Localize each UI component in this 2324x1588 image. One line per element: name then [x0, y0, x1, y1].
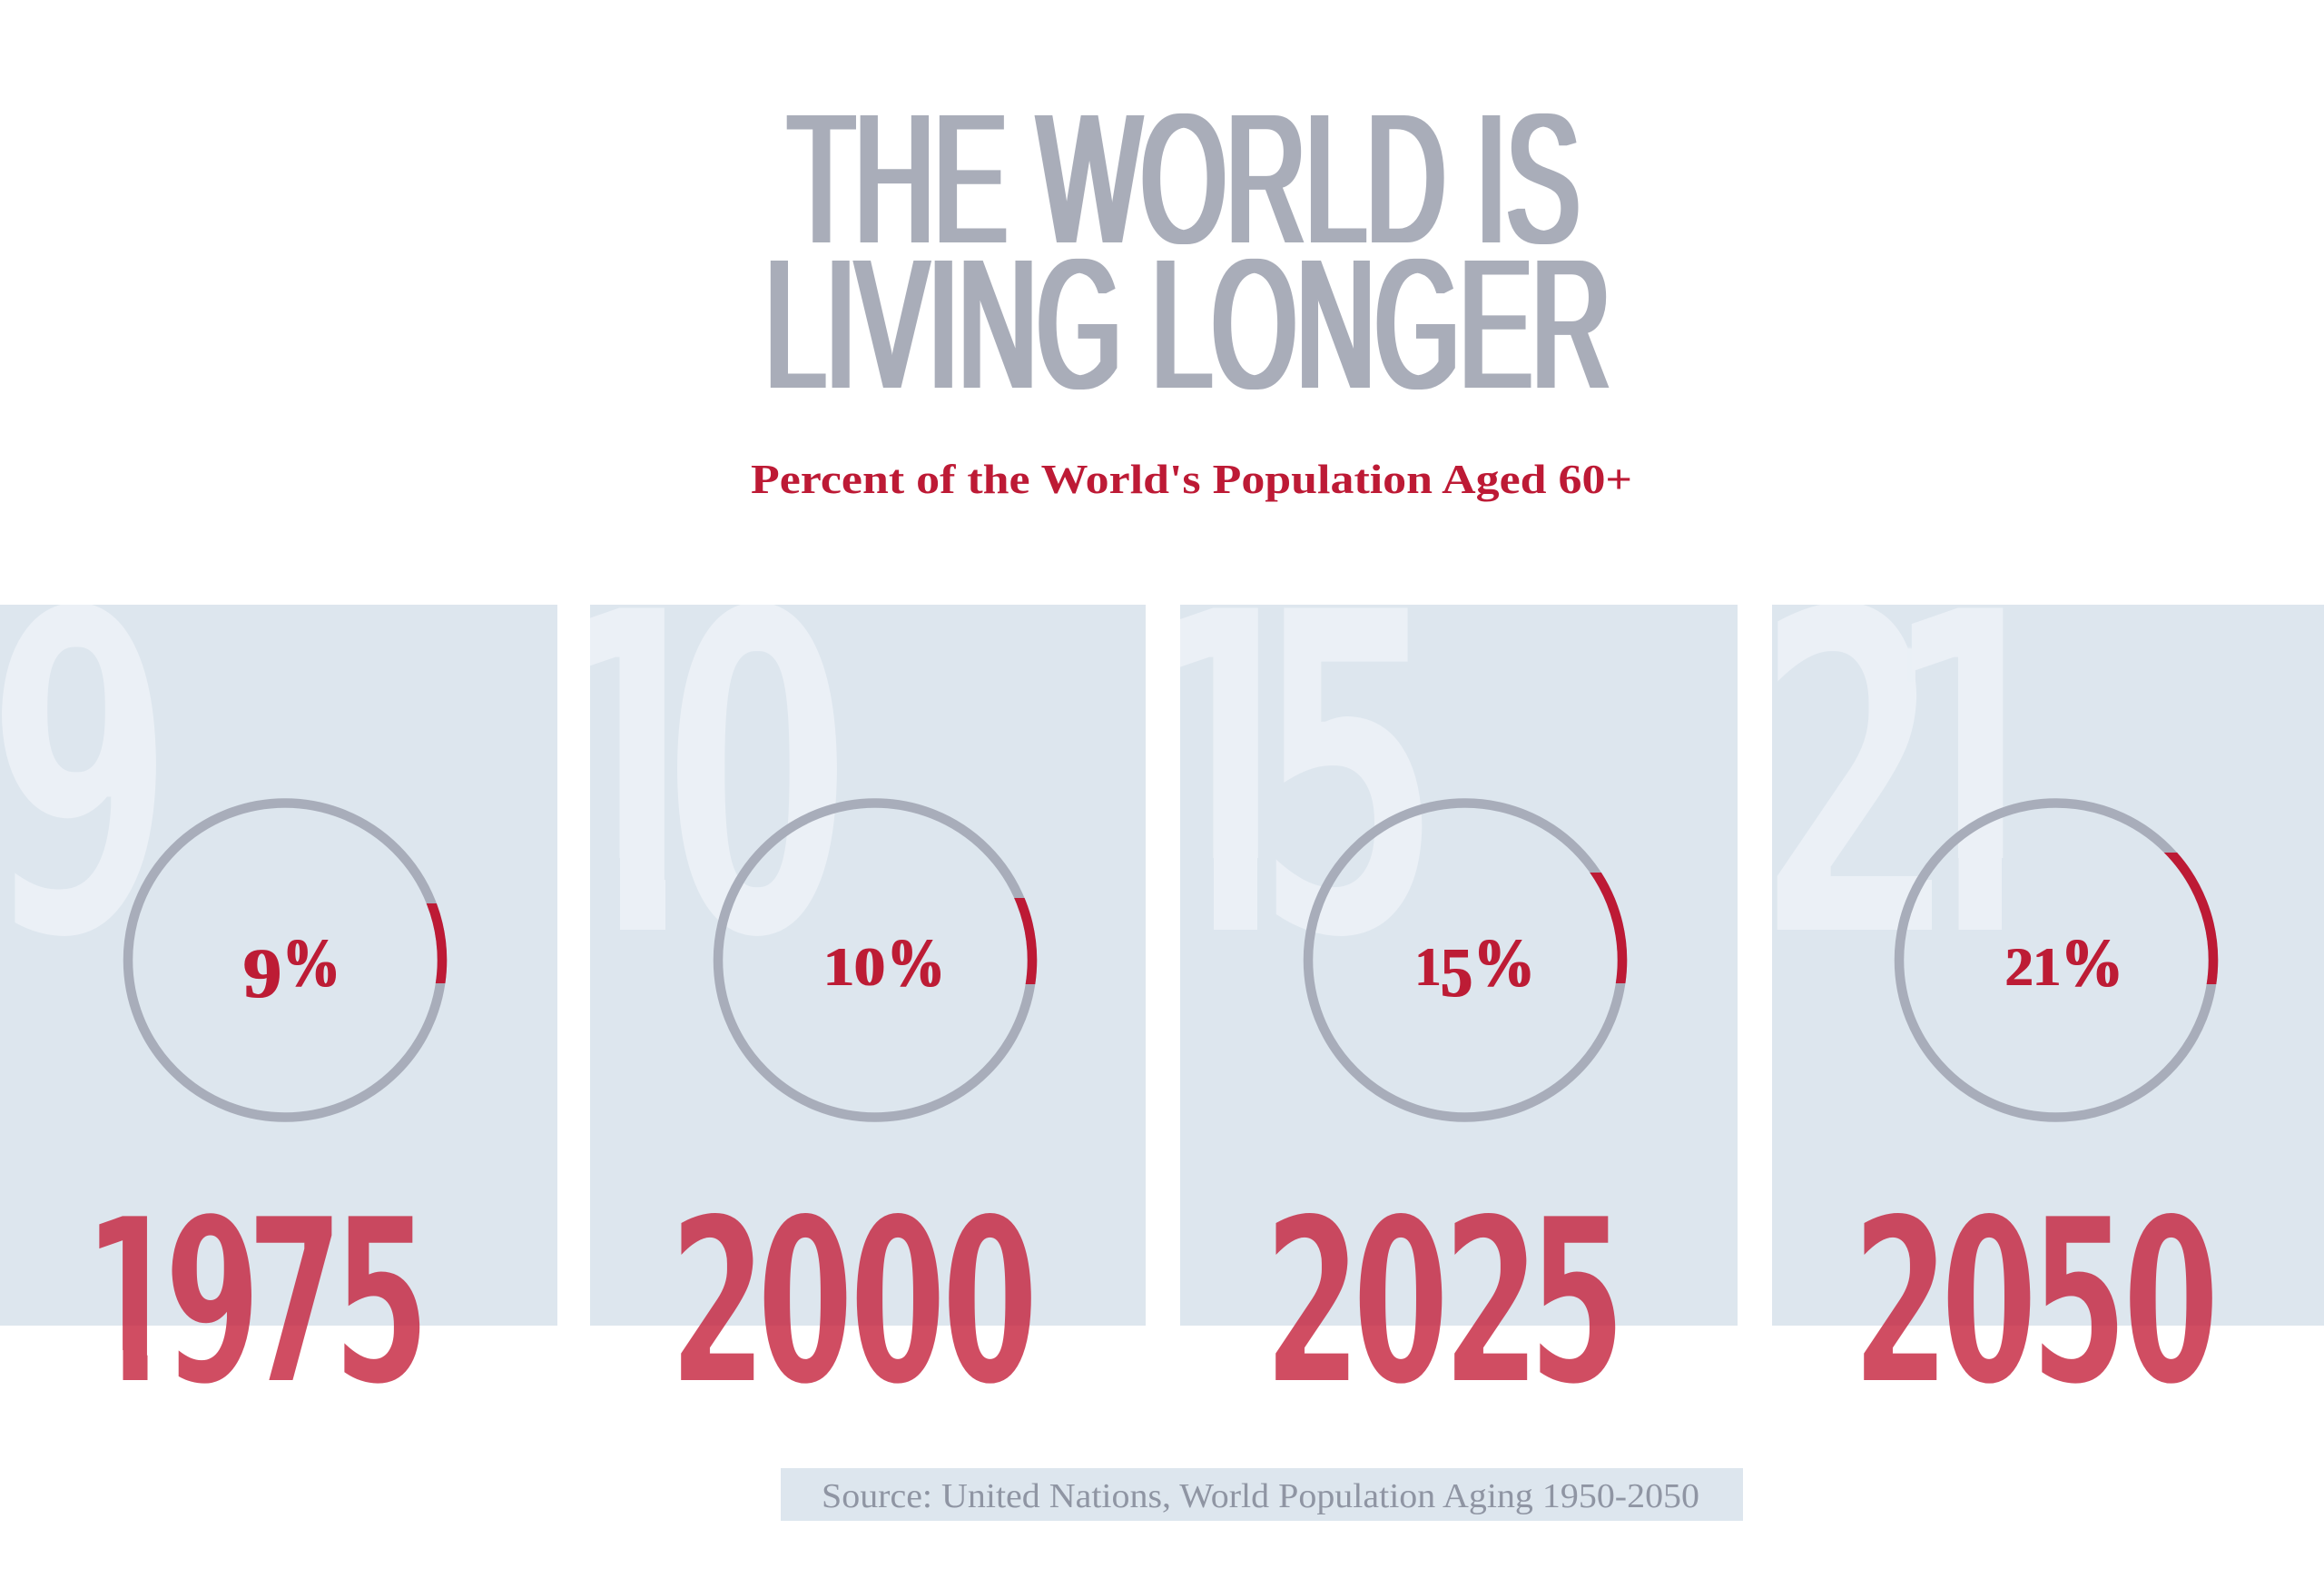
year 1975: 1975: [84, 1167, 429, 1438]
panel background 2050: [1772, 605, 2324, 1326]
ring chart 15%: [1308, 803, 1622, 1117]
panel background 2025: [1180, 605, 1738, 1326]
source bar: [781, 1468, 1743, 1521]
ghost number 15: 5: [1254, 514, 1443, 1042]
panel: 2025: [1180, 605, 1738, 1384]
ring chart 9%: [128, 803, 442, 1117]
title: [765, 76, 1610, 428]
year 2000: 2000: [670, 1167, 1038, 1438]
percent label 15%: [1415, 925, 1535, 1011]
panel: 2050: [1772, 605, 2324, 1384]
percent label 15%: %: [1473, 925, 1535, 1001]
ghost number 15: 1: [1135, 514, 1324, 1042]
percent label 10%: 10: [823, 937, 885, 997]
percent label 21%: 21: [2005, 937, 2061, 997]
percent label 9%: 9: [243, 933, 281, 1012]
title: LIVING LONGER: [765, 222, 1610, 428]
year 2025: 2025: [1265, 1167, 1625, 1438]
ring chart 21%: [1899, 803, 2213, 1117]
panel background 1975: [0, 605, 557, 1326]
source bar: Source: United Nations, World Population Aging 1950-2050: [822, 1477, 1699, 1515]
ghost number 15: [1180, 608, 1422, 936]
percent label 15%: 5: [1441, 932, 1472, 1011]
percent label 10%: %: [887, 925, 945, 1001]
panel background 2000: [590, 605, 1146, 1326]
year 2050: 2050: [1853, 1167, 2219, 1438]
panel: 1975: [0, 605, 557, 1384]
ghost number 21: 21: [1754, 514, 2069, 1042]
percent label 21%: [2005, 925, 2123, 1001]
panel: 2000: [590, 605, 1146, 1384]
percent label 15%: 1: [1415, 937, 1441, 997]
ghost number 10: [590, 605, 837, 936]
ghost number 10: 0: [663, 514, 852, 1042]
percent label 10%: [823, 925, 945, 1001]
subtitle: Percent of the World's Population Aged 60+: [751, 456, 1632, 502]
title: THE WORLD IS: [788, 76, 1580, 282]
percent label 9%: %: [282, 925, 340, 1001]
percent label 9%: [243, 925, 340, 1012]
percent label 21%: %: [2061, 925, 2123, 1001]
ring chart 10%: [718, 803, 1032, 1117]
ghost number 10: 1: [540, 514, 730, 1042]
